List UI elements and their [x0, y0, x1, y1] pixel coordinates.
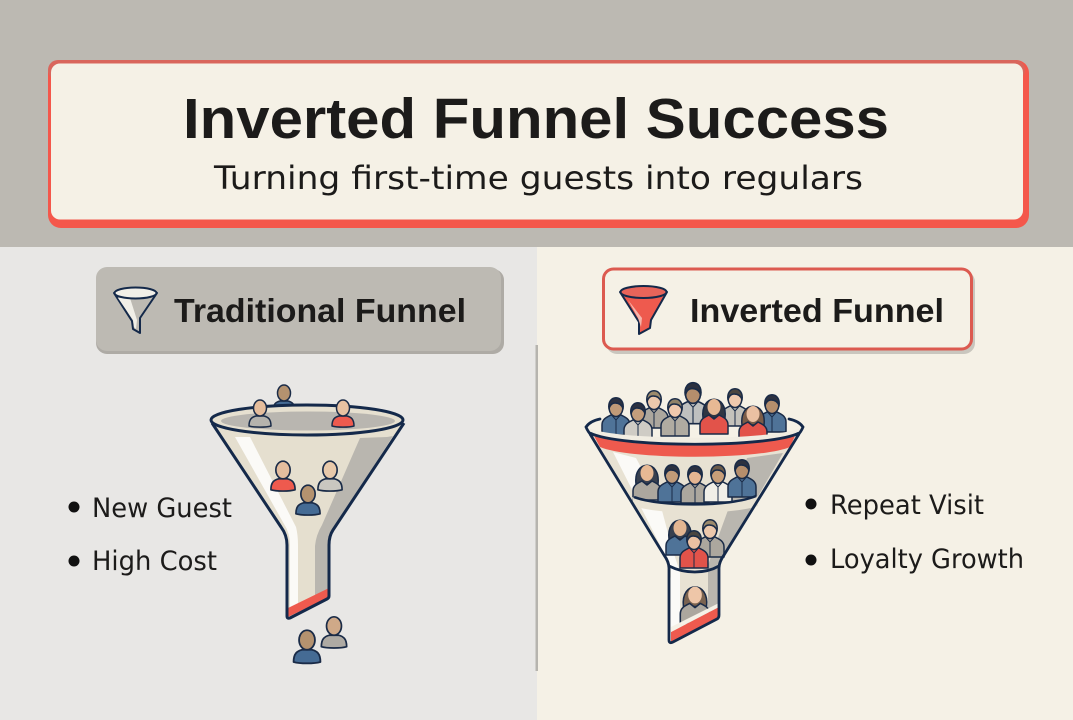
icon: red funnel [620, 286, 667, 334]
background: inverted panel [537, 247, 1073, 720]
middle row of people [633, 460, 756, 503]
bullet list: traditional [68, 493, 232, 577]
panel heading: traditional funnel [96, 267, 504, 354]
people on rim [249, 400, 271, 427]
background: header band [0, 0, 1073, 247]
heading label: Inverted Funnel [690, 292, 944, 329]
subtitle: Turning first-time guests into regulars [213, 159, 863, 197]
rim front and red band [586, 419, 803, 457]
stem person [680, 587, 710, 623]
funnel outline [590, 434, 799, 643]
funnel body [588, 428, 801, 642]
bullet list: inverted: Loyalty Growth [830, 544, 1024, 575]
icon: outline funnel [114, 288, 157, 333]
traditional funnel illustration [211, 385, 404, 663]
top row of people [602, 383, 786, 441]
person behind rim [273, 385, 295, 412]
stem base red band [671, 607, 719, 642]
title card [48, 60, 1029, 228]
middle ring [632, 496, 758, 513]
background: traditional panel [0, 247, 537, 720]
bullet list: traditional: High Cost [92, 546, 217, 577]
bullet list: inverted [806, 490, 1024, 575]
panel heading: inverted funnel [604, 269, 975, 354]
heading label: Traditional Funnel [174, 292, 466, 329]
inverted funnel illustration [586, 383, 803, 643]
funnel body [212, 423, 404, 618]
bullet list: traditional: New Guest [92, 493, 232, 524]
people below funnel [321, 617, 347, 648]
bullet list: inverted: Repeat Visit [830, 490, 984, 521]
lower group of people [666, 520, 724, 568]
people inside funnel [271, 461, 295, 491]
title: Inverted Funnel Success [183, 87, 889, 151]
funnel rim [211, 405, 403, 435]
stem collar [669, 566, 719, 582]
